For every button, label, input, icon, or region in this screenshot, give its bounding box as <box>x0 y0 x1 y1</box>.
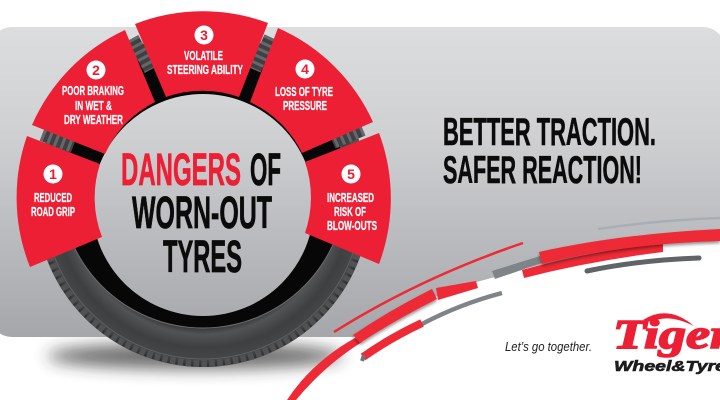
logo: Tiger Wheel & Tyre: Wheel&Tyre <box>614 358 720 375</box>
segment 5: blow-outs: RISK OF <box>334 204 366 219</box>
slogan <box>443 111 656 192</box>
segment 5: blow-outs: BLOW-OUTS <box>327 218 377 233</box>
segment 3: volatile steering: 3 <box>200 27 208 43</box>
segment 2: poor braking <box>32 30 155 154</box>
title: DANGERS <box>121 144 241 195</box>
title: TYRES <box>163 231 242 282</box>
white swoosh area <box>340 238 720 400</box>
segment 5: blow-outs: 5 <box>347 166 355 182</box>
segment 1: reduced road grip: 1 <box>49 166 57 182</box>
icon: tyre <box>36 33 370 367</box>
logo: Tiger Wheel & Tyre: Tiger <box>613 311 720 357</box>
segment 1: reduced road grip: REDUCED <box>34 190 72 205</box>
swoosh graphic <box>287 218 720 400</box>
segment 5: blow-outs <box>305 133 391 264</box>
segment 1: reduced road grip <box>17 136 102 267</box>
panel: red danger ring <box>17 11 391 267</box>
segment 2: poor braking: 2 <box>92 62 100 78</box>
segment 1: reduced road grip: ROAD GRIP <box>31 204 75 219</box>
segment 5: blow-outs: INCREASED <box>327 190 374 205</box>
title <box>121 144 281 282</box>
segment 4: loss of tyre pressure: PRESSURE <box>283 98 327 113</box>
segment 4: loss of tyre pressure: LOSS OF TYRE <box>275 84 333 99</box>
segment 2: poor braking: IN WET & <box>75 98 112 113</box>
panel: grey background <box>0 27 720 337</box>
segment 3: volatile steering: STEERING ABILITY <box>167 62 243 77</box>
tyre shadow <box>47 343 343 369</box>
segment 3: volatile steering: VOLATILE <box>184 48 223 63</box>
tagline: Let’s go together. <box>505 340 592 354</box>
segment 4: loss of tyre pressure <box>250 28 373 153</box>
segment 2: poor braking: DRY WEATHER <box>64 112 123 127</box>
segment 4: loss of tyre pressure: 4 <box>301 61 309 77</box>
tyre tread visible through gaps <box>42 37 363 147</box>
segment 3: volatile steering <box>135 11 268 97</box>
text: OF <box>250 144 281 195</box>
title: WORN-OUT <box>132 187 272 238</box>
segment 2: poor braking: POOR BRAKING <box>62 83 124 98</box>
logo: Tiger Wheel & Tyre <box>613 311 720 375</box>
